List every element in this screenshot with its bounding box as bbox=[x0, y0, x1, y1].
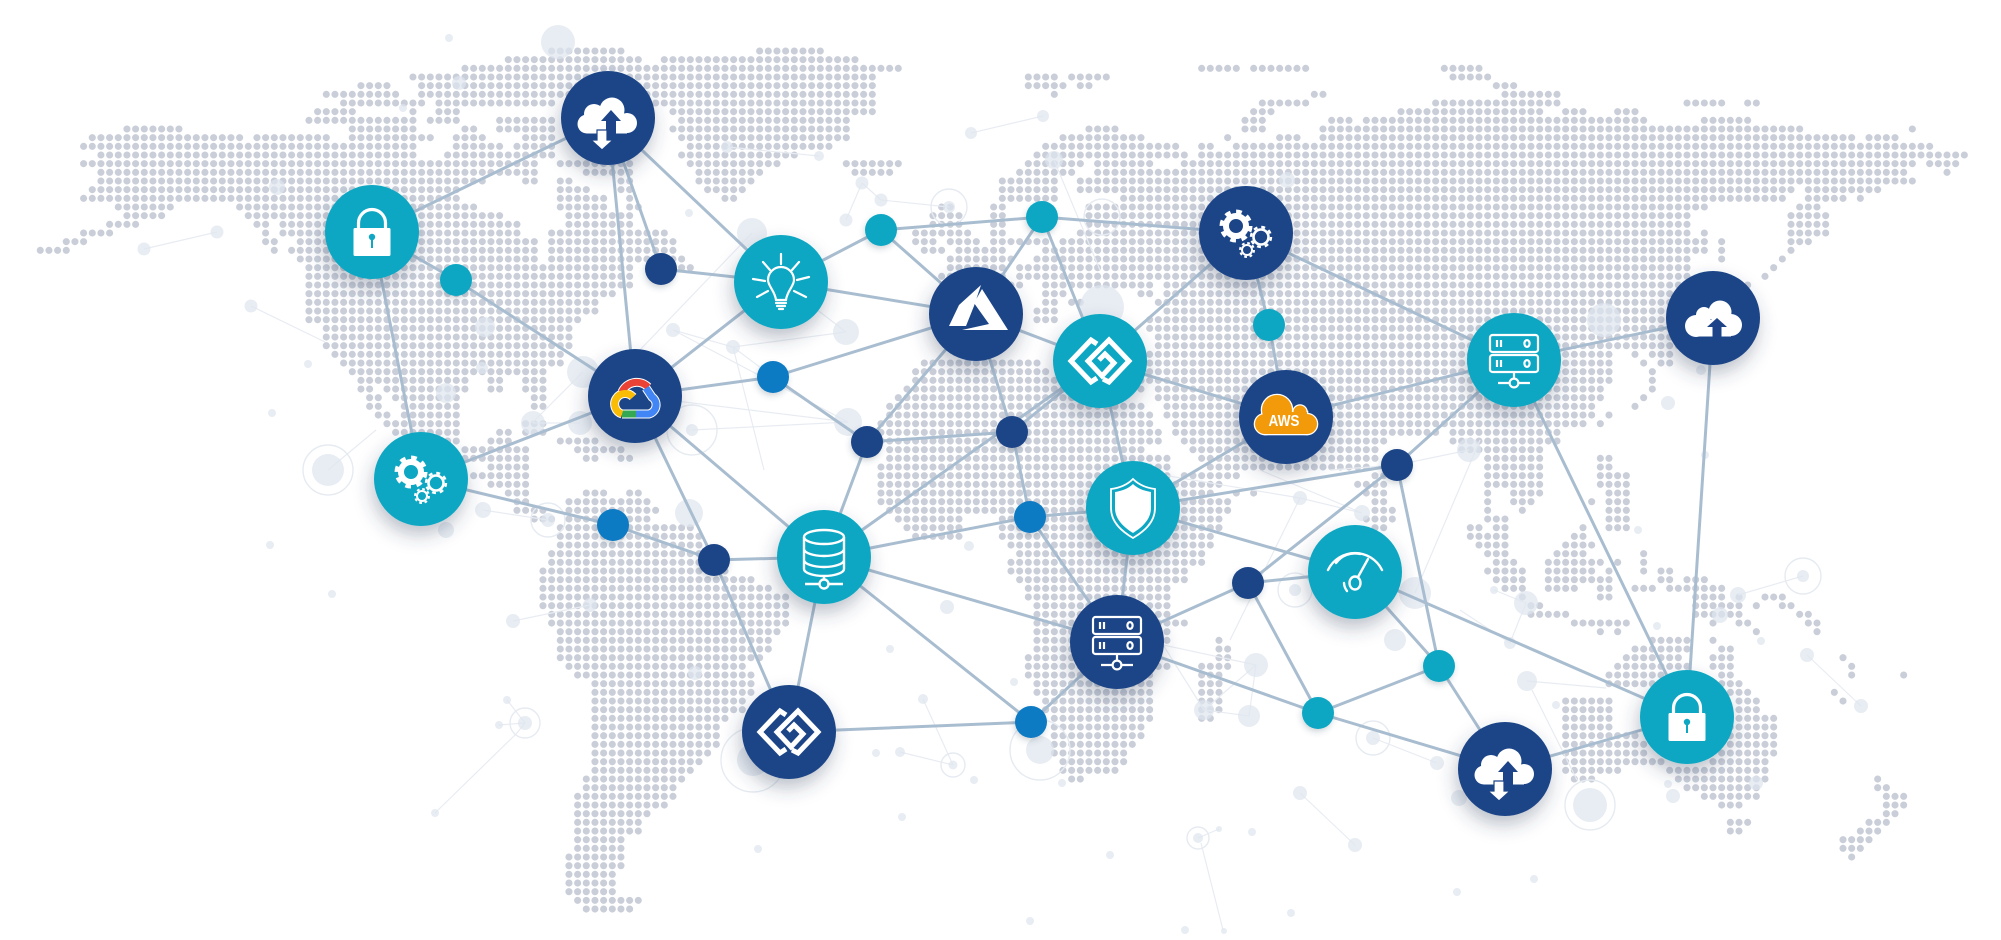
icon: speed gauge bbox=[1308, 525, 1402, 619]
icon: server, teal bbox=[1467, 313, 1561, 407]
icon: shield bbox=[1086, 461, 1180, 555]
icon: Microsoft Azure logo bbox=[929, 267, 1023, 361]
icon: gateway logo, navy bbox=[742, 685, 836, 779]
icon: AWS cloud bbox=[1239, 370, 1333, 464]
icon: gateway logo, teal bbox=[1053, 314, 1147, 408]
icon: AWS cloud: AWS bbox=[1268, 413, 1300, 430]
icon: gears, teal bbox=[374, 432, 468, 526]
icon: padlock, west bbox=[325, 185, 419, 279]
icon: cloud upload download, north bbox=[561, 71, 655, 165]
icon: database bbox=[777, 510, 871, 604]
icon: gears, navy bbox=[1199, 186, 1293, 280]
icon: light bulb bbox=[734, 235, 828, 329]
icon: server, navy bbox=[1070, 595, 1164, 689]
icon: cloud upload download, south bbox=[1458, 722, 1552, 816]
icon: Google Cloud logo bbox=[588, 349, 682, 443]
icon: padlock, east bbox=[1640, 670, 1734, 764]
connection lines between nodes bbox=[372, 118, 1713, 769]
icon: cloud upload bbox=[1666, 271, 1760, 365]
small junction nodes bbox=[440, 201, 1455, 738]
